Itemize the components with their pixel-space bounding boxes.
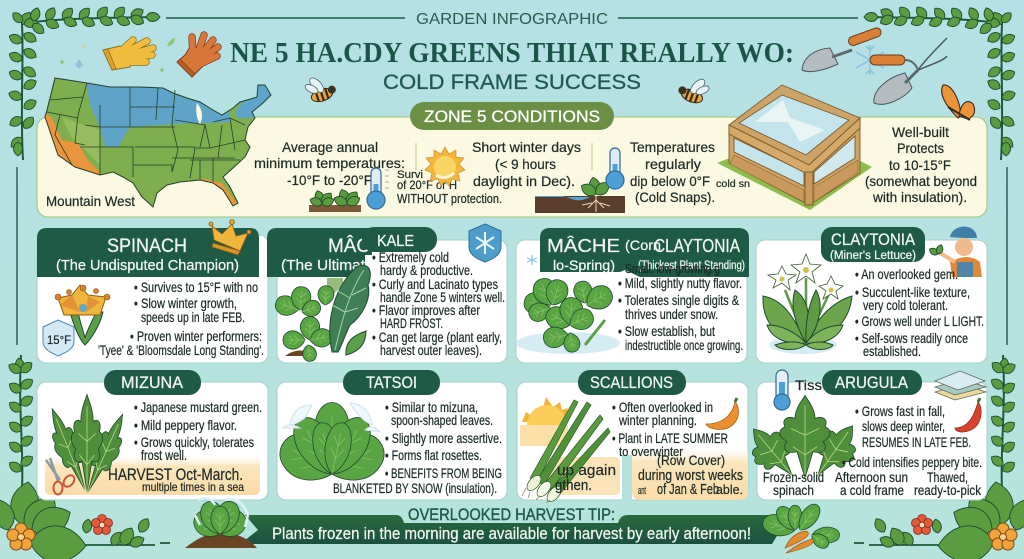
bullets: mache [618, 261, 743, 353]
bullets: scallions: of Jan & Feb [657, 482, 719, 498]
text: well-built protects [865, 124, 977, 205]
header: mache: (The Ultimat [281, 257, 366, 274]
header: kale [362, 227, 437, 252]
icon: snowflake [856, 45, 884, 75]
icon: trowel [802, 27, 882, 72]
illustration: frozen plant in soil [185, 498, 257, 548]
vine and flowers bottom left [0, 355, 170, 559]
bullets: scallions: able. [716, 482, 743, 497]
bullets: scallions: (Row Cover) [657, 452, 725, 468]
bullets: scallions: • Plant in LATE SUMMER [612, 430, 728, 446]
text: average annual minimum temperatures: minimum temperatures: [254, 155, 405, 171]
bullets: claytonia: very cold tolerant. [863, 297, 948, 313]
icon: scissors [46, 458, 77, 494]
bullets: spinach: • Proven winter performers: [130, 328, 262, 344]
card: arugula [738, 370, 987, 500]
text: well-built protects: with insulation). [872, 189, 967, 205]
map of the USA with cold zones [44, 77, 272, 208]
icon: gardener [928, 227, 982, 277]
title: NE 5 HA.CDY GREENS THIAT REALLY WO: [230, 37, 794, 69]
caption: frozen-solid spinach: spinach [773, 482, 814, 498]
text: temperatures dip below zero: Temperatures [630, 139, 715, 155]
badge: zone 5 conditions [410, 102, 614, 130]
text: well-built protects: to 10-15°F [889, 157, 951, 173]
icon: snowflake shield [469, 224, 501, 262]
bullets: mache: indestructible once growing. [625, 337, 743, 353]
text: average annual minimum temperatures: Average annual [282, 139, 378, 155]
icon: 15F shield [43, 320, 74, 356]
icon: yellow glove [103, 40, 153, 70]
header: scallions [578, 370, 686, 395]
header: claytonia [821, 227, 925, 262]
icon: orange pepper [706, 398, 739, 429]
icon: sun [425, 147, 465, 186]
header: mache corn: CLAYTONIA [654, 236, 740, 256]
icon: bee right [676, 71, 714, 107]
text: temperatures dip below zero: regularly [645, 156, 701, 172]
bullets: claytonia: • Self-sows readily once [855, 330, 968, 346]
bullets: tatsoi: • Slightly more assertive. [385, 430, 502, 446]
header: mizuna [104, 370, 201, 395]
header: spinach [37, 228, 259, 277]
header: claytonia: CLAYTONIA [831, 230, 916, 249]
banner heading: OVERLOOKED HARVEST TIP: [408, 505, 615, 524]
header: arugula: ARUGULA [835, 374, 908, 392]
text: well-built protects: Protects [897, 140, 944, 156]
bullets: tatsoi: spoon-shaped leaves. [391, 412, 493, 428]
header: claytonia: (Miner's Lettuce) [830, 250, 916, 262]
text: well-built protects: Well-built [892, 124, 949, 140]
bullets: claytonia: • Succulent-like texture, [855, 284, 970, 300]
bullets: scallions: during worst weeks [638, 468, 743, 484]
card: spinach [37, 220, 268, 363]
icon: hand fork and trowel [870, 38, 947, 104]
bullets: arugula [842, 403, 982, 470]
header: arugula [822, 370, 922, 395]
bullets: kale: harvest outer leaves). [380, 342, 482, 358]
bullets: kale [372, 249, 505, 358]
bullets: tatsoi: • Similar to mizuna, [385, 399, 478, 415]
bullets: arugula: • Grows fast in fall, [855, 403, 945, 419]
illustration: crowned spinach [55, 285, 110, 345]
bullets: tatsoi: • BENEFITS FROM BEING [385, 465, 502, 481]
badge: zone 5 conditions: ZONE 5 CONDITIONS [424, 108, 600, 126]
text: short winter days: (< 9 hours [495, 156, 556, 172]
bullets: mizuna: • Grows quickly, tolerates [134, 434, 254, 450]
caption: afternoon sun: a cold frame [840, 482, 904, 498]
header: mizuna: MIZUNA [121, 374, 183, 392]
header: tatsoi [343, 370, 440, 395]
bullets: claytonia: established. [863, 343, 921, 359]
text: survival without protection [397, 169, 502, 206]
bullets: spinach: • Survives to 15°F with no [134, 279, 258, 295]
caption: thawed [914, 469, 982, 498]
illustration: mizuna leaves [41, 394, 134, 497]
text: survival without protection: WITHOUT protection. [397, 192, 502, 206]
bullets: tatsoi: • Forms flat rosettes. [385, 447, 482, 463]
card: claytonia [756, 227, 987, 363]
bullets: mizuna: multiple times in a sea [142, 480, 244, 494]
bullets: mache: • Mild, slightly nutty flavor. [618, 275, 742, 291]
bullets: spinach: • Slow winter growth, [134, 295, 237, 311]
card: mache and claytonia overlap [516, 228, 749, 363]
icon: gold crown [209, 220, 251, 255]
illustration: carrots [760, 501, 840, 553]
caption: afternoon sun [835, 469, 908, 498]
corner vine top left [7, 4, 160, 160]
text: short winter days: Short winter days [472, 139, 581, 155]
illustration: tatsoi rosette in snow [272, 402, 392, 492]
caption: afternoon sun: Afternoon sun [835, 469, 908, 485]
bullets: scallions: winter planning. [618, 412, 697, 428]
bullets: spinach: 'Tyee' & 'Bloomsdale Long Standing'. [98, 342, 264, 358]
bullets: scallions [555, 399, 743, 498]
header: mache corn [540, 228, 749, 277]
illustration: scallions [522, 400, 610, 504]
caption: frozen-solid spinach [763, 469, 824, 498]
text: survival without protection: of 20°F or H [397, 178, 457, 192]
bullets: spinach [98, 279, 264, 358]
header: mache [267, 228, 372, 277]
bullets: mizuna: HARVEST Oct-March. [108, 466, 243, 484]
caption: thawed: ready-to-pick [914, 482, 982, 498]
bullets: scallions: • Often overlooked in [612, 399, 713, 415]
header: mache corn: lo-Spring) [553, 257, 615, 273]
icon: orange glove [177, 35, 218, 77]
icon: bee left [301, 70, 338, 105]
bullets: scallions: ant [638, 485, 646, 497]
illustration: mache rosettes in snow [516, 255, 620, 354]
header: mache: MÂC [328, 235, 370, 257]
bullets: scallions: gthen. [555, 477, 592, 494]
bullets: kale: • Extremely cold [372, 249, 449, 265]
text: well-built protects: (somewhat beyond [865, 173, 977, 189]
bullets: spinach: speeds up in late FEB. [141, 309, 245, 325]
text: short winter days [472, 139, 581, 189]
illustration: claytonia rosette [763, 254, 852, 354]
text: temperatures dip below zero [630, 139, 750, 205]
bullets: mizuna: frost well. [141, 447, 187, 463]
small decorations near gloves [60, 38, 175, 72]
header: mache corn: (Corn [625, 237, 661, 253]
caption: frozen-solid spinach: Frozen-solid [763, 469, 824, 485]
illustration: arugula leaves [738, 396, 869, 488]
bullets: mache: • Slow establish, but [618, 323, 715, 339]
header: tatsoi: TATSOI [366, 374, 417, 392]
header: mache corn: MÂCHE [547, 236, 620, 256]
bullets: kale: • Flavor improves after [372, 302, 480, 318]
bullets: tatsoi: BLANKETED BY SNOW (insulation). [333, 480, 497, 496]
text: average annual minimum temperatures: -10°F to -20°F [287, 172, 372, 188]
bullets: arugula: slows deep winter, [862, 418, 945, 434]
text: survival without protection: Survi [397, 169, 423, 181]
icon: 15F shield: 15°F [47, 333, 71, 347]
bullets: kale: HARD FROST. [380, 315, 443, 331]
illustration: cold frame [717, 85, 872, 210]
icon: thermometer arugula [774, 370, 790, 410]
icon: thermometer [367, 168, 389, 209]
text: short winter days: daylight in Dec). [473, 173, 575, 189]
text: average annual minimum temperatures [254, 139, 405, 188]
corner vine top right [864, 4, 1017, 160]
bullets: kale: hardy & productive. [380, 262, 473, 278]
subtitle: COLD FRAME SUCCESS [383, 71, 641, 94]
icon: red chili [955, 398, 981, 432]
header: kale: KALE [377, 233, 414, 250]
card: mizuna [37, 370, 268, 500]
eyebrow: garden infographic: GARDEN INFOGRAPHIC [416, 11, 608, 28]
icon: soil with plant and thermometer [535, 148, 625, 213]
icon: butterfly [942, 85, 975, 120]
bullets: arugula: RESUMES IN LATE FEB. [862, 435, 971, 450]
icon: stacked row cover layers [935, 371, 986, 400]
caption: thawed: Thawed, [927, 469, 968, 485]
bullets: scallions: to overwinter [619, 444, 684, 459]
card: tatsoi [272, 370, 507, 500]
bullets: mache: thrives under snow. [625, 306, 718, 322]
icon: sun over water [520, 397, 568, 446]
bullets: mizuna: • Japanese mustard green. [134, 399, 262, 415]
bullets: mizuna [108, 399, 262, 494]
icon: sprouts in soil [309, 188, 362, 212]
text: temperatures dip below zero: (Cold Snaps). [635, 189, 715, 205]
header: mache corn: (Thickest Plant Standing) [638, 260, 745, 272]
header: spinach: SPINACH [107, 236, 187, 257]
bullets: claytonia [855, 266, 984, 359]
bullets: mache: • Tolerates single digits & [618, 292, 740, 308]
banner: overlooked harvest tip [240, 505, 790, 544]
bullets: mizuna: • Mild peppery flavor. [134, 417, 237, 433]
panel: zone 5 conditions [37, 70, 987, 217]
header: scallions: SCALLIONS [590, 374, 673, 392]
vine and flowers bottom right [854, 355, 1024, 559]
card: mache and kale [267, 224, 507, 363]
bullets: kale: • Curly and Lacinato types [372, 276, 498, 292]
header: spinach: (The Undisputed Champion) [56, 257, 239, 274]
label: mountain west: Mountain West [46, 193, 135, 209]
bullets: kale: handle Zone 5 winters well. [380, 289, 505, 305]
illustration: kale plants [273, 265, 370, 362]
banner text: Plants frozen in the morning are available for harvest by early afternoon! [272, 525, 751, 543]
bullets: mache: Small, low-growing g [625, 261, 720, 276]
bullets: claytonia: • An overlooked gem. [855, 266, 958, 282]
bullets: scallions: up again [557, 462, 616, 479]
bullets: tatsoi [333, 399, 502, 496]
text: temperatures dip below zero: cold sn [716, 179, 750, 190]
bullets: kale: • Can get large (plant early, [372, 329, 502, 345]
text: tissue fragment: Tiss [795, 377, 822, 393]
card: scallions [517, 370, 748, 504]
text: temperatures dip below zero: dip below 0°F [630, 173, 710, 189]
